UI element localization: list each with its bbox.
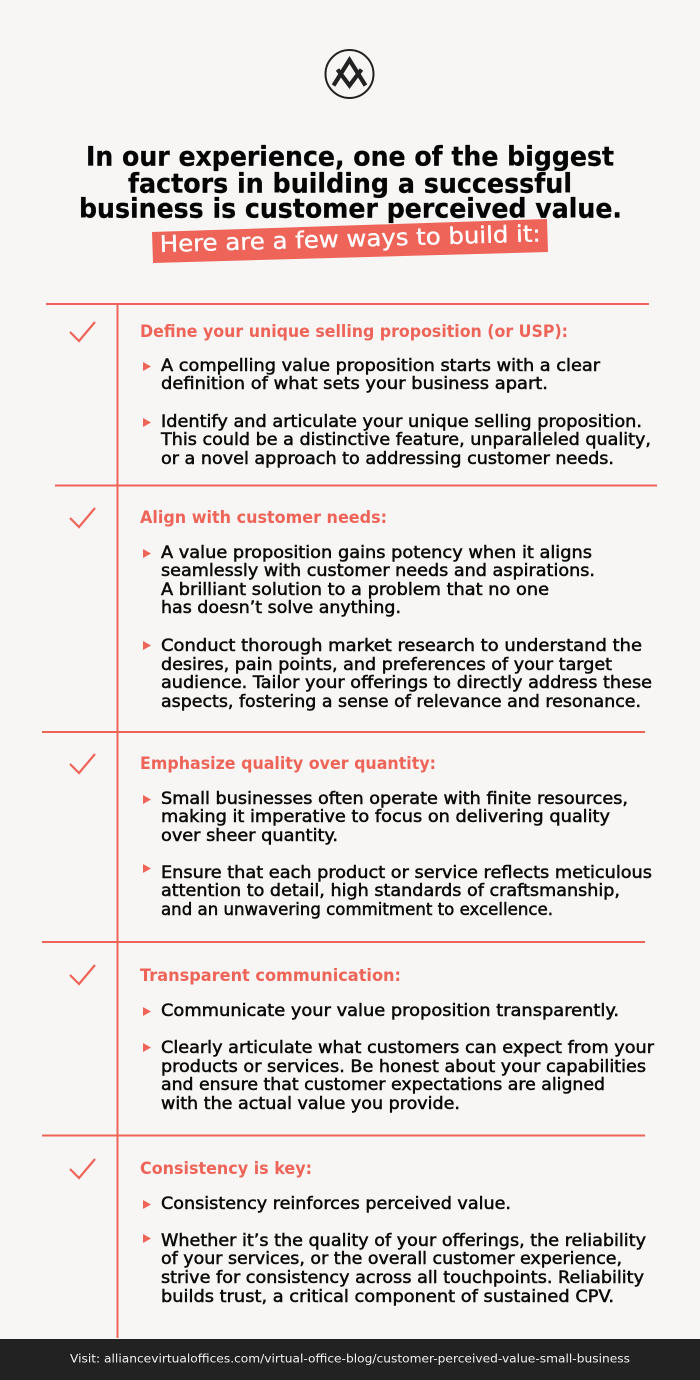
text block: Communicate your value proposition transparently. — [161, 1001, 619, 1020]
text block: attention to detail, high standards of craftsmanship, — [161, 881, 620, 900]
text block: This could be a distinctive feature, unparalleled quality, — [160, 430, 651, 449]
text block: making it imperative to focus on delivering quality — [161, 807, 610, 826]
icon: check — [70, 754, 95, 773]
footer bar: Visit: alliancevirtualoffices.com/virtual-office-blog/customer-perceived-value-small-business — [70, 1352, 630, 1366]
bullet — [143, 641, 151, 650]
text block: desires, pain points, and preferences of your target — [161, 655, 613, 674]
text block: Conduct thorough market research to understand the — [161, 636, 642, 655]
text block — [161, 636, 652, 711]
icon: check — [70, 965, 95, 984]
icon: check — [70, 508, 95, 527]
text block — [161, 543, 595, 617]
title: factors in building a successful — [128, 168, 572, 200]
text block: aspects, fostering a sense of relevance and resonance. — [161, 692, 641, 711]
text block: seamlessly with customer needs and aspirations. — [161, 561, 595, 580]
panel: transparent communication — [42, 941, 654, 1113]
icon: logo — [326, 50, 374, 98]
text block: A compelling value proposition starts with a clear — [161, 356, 600, 375]
text block: Identify and articulate your unique selling proposition. — [161, 412, 642, 431]
bullet — [143, 362, 151, 371]
icon: check — [70, 1159, 95, 1178]
text block — [161, 789, 628, 845]
text block: A brilliant solution to a problem that no one — [161, 580, 549, 599]
text block — [160, 412, 651, 468]
text block: builds trust, a critical component of sustained CPV. — [161, 1287, 614, 1306]
heading: Consistency is key: — [140, 1159, 312, 1178]
text block: and an unwavering commitment to excellence. — [161, 900, 553, 919]
text block: audience. Tailor your offerings to directly address these — [161, 673, 652, 692]
text block: Small businesses often operate with finite resources, — [161, 789, 628, 808]
text block — [161, 1038, 654, 1113]
bullet — [143, 1200, 151, 1209]
bullet — [143, 864, 151, 873]
bullet — [143, 1234, 151, 1243]
bullet — [143, 418, 151, 427]
panel: quality over quantity — [42, 731, 652, 919]
text block: A value proposition gains potency when it aligns — [161, 543, 592, 562]
icon: check — [70, 322, 95, 341]
heading: Define your unique selling proposition (or USP): — [140, 322, 568, 341]
title: business is customer perceived value. — [79, 194, 622, 224]
heading: Align with customer needs: — [140, 508, 387, 527]
text block: Clearly articulate what customers can expect from your — [161, 1038, 654, 1057]
text block: with the actual value you provide. — [161, 1094, 460, 1113]
banner: subtitle: Here are a few ways to build it: — [159, 221, 541, 258]
text block: and ensure that customer expectations are aligned — [161, 1075, 605, 1094]
text block: strive for consistency across all touchpoints. Reliability — [161, 1268, 644, 1287]
bullet — [143, 549, 151, 558]
footer bar — [0, 1339, 700, 1380]
panel: consistency — [42, 1134, 646, 1306]
text block: over sheer quantity. — [161, 826, 338, 845]
heading: Transparent communication: — [140, 966, 401, 985]
text block — [161, 356, 600, 393]
text block: products or services. Be honest about your capabilities — [161, 1057, 646, 1076]
text block: has doesn’t solve anything. — [161, 598, 401, 617]
bullet — [143, 1007, 151, 1016]
panel: customer needs — [55, 484, 657, 711]
text block — [161, 1231, 646, 1306]
text block: definition of what sets your business apart. — [161, 374, 548, 393]
vertical timeline line — [116, 304, 118, 1338]
text block: Consistency reinforces perceived value. — [161, 1194, 511, 1213]
text block: of your services, or the overall customer experience, — [161, 1249, 622, 1268]
bullet — [143, 795, 151, 804]
bullet — [143, 1043, 151, 1052]
title — [79, 142, 622, 224]
text block: or a novel approach to addressing customer needs. — [161, 449, 614, 468]
text block — [161, 863, 652, 919]
title: In our experience, one of the biggest — [86, 142, 614, 172]
text block: Whether it’s the quality of your offerings, the reliability — [161, 1231, 646, 1250]
heading: Emphasize quality over quantity: — [140, 754, 436, 773]
text block: Ensure that each product or service reflects meticulous — [161, 863, 652, 882]
panel: unique selling proposition — [46, 303, 651, 468]
